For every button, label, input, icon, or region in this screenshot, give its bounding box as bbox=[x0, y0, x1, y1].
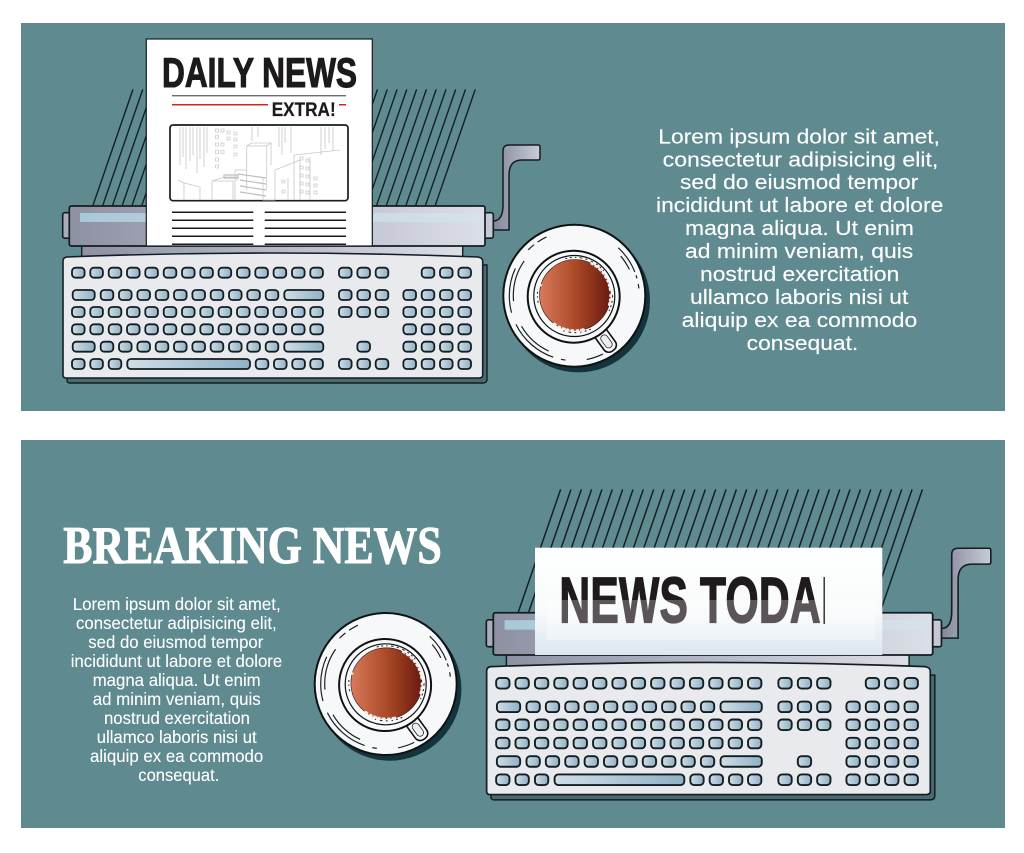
text block: bottom: nostrud exercitation bbox=[104, 708, 250, 728]
text block: top: sed do eiusmod tempor bbox=[680, 171, 918, 194]
text block: top: Lorem ipsum dolor sit amet, bbox=[658, 125, 940, 148]
extra label: EXTRA! bbox=[272, 100, 336, 121]
text block: bottom: aliquip ex ea commodo bbox=[90, 746, 263, 766]
text block: top: magna aliqua. Ut enim bbox=[685, 217, 914, 240]
text block: bottom bbox=[71, 594, 282, 785]
text block: bottom: consectetur adipisicing elit, bbox=[76, 613, 277, 633]
text block: top: nostrud exercitation bbox=[700, 263, 899, 286]
panel: top banner background bbox=[21, 23, 1005, 411]
newspaper masthead: DAILY NEWS bbox=[162, 49, 357, 96]
heading: breaking news: BREAKING NEWS bbox=[63, 517, 442, 575]
panel: bottom banner background bbox=[21, 440, 1005, 828]
text block: top: ad minim veniam, quis bbox=[685, 240, 913, 263]
text block: top: consequat. bbox=[747, 332, 858, 355]
text block: top bbox=[656, 125, 943, 355]
icon: coffee cup bottom bbox=[315, 613, 461, 761]
text block: top: consectetur adipisicing elit, bbox=[663, 148, 938, 171]
typewriter: top bbox=[63, 89, 540, 383]
text block: bottom: incididunt ut labore et dolore bbox=[71, 651, 282, 671]
newspaper bbox=[146, 39, 372, 246]
text block: top: aliquip ex ea commodo bbox=[682, 309, 917, 332]
text block: top: ullamco laboris nisi ut bbox=[690, 286, 909, 309]
newspaper columns of text bbox=[172, 212, 346, 244]
text block: bottom: ad minim veniam, quis bbox=[93, 689, 261, 709]
masthead rule bbox=[172, 95, 346, 96]
newspaper photo: city sketch bbox=[170, 125, 348, 201]
text block: bottom: magna aliqua. Ut enim bbox=[93, 670, 261, 690]
typed headline: NEWS TODA bbox=[559, 563, 821, 636]
icon: coffee cup top bbox=[503, 225, 650, 372]
text block: bottom: consequat. bbox=[138, 765, 219, 785]
text block: top: incididunt ut labore et dolore bbox=[656, 194, 943, 217]
text block: bottom: Lorem ipsum dolor sit amet, bbox=[73, 594, 281, 614]
typing cursor bbox=[824, 577, 825, 624]
text block: bottom: ullamco laboris nisi ut bbox=[97, 727, 257, 747]
text block: bottom: sed do eiusmod tempor bbox=[88, 632, 263, 652]
typed paper sheet bbox=[535, 548, 882, 655]
typewriter: bottom bbox=[486, 489, 991, 800]
red rule bbox=[172, 104, 346, 106]
